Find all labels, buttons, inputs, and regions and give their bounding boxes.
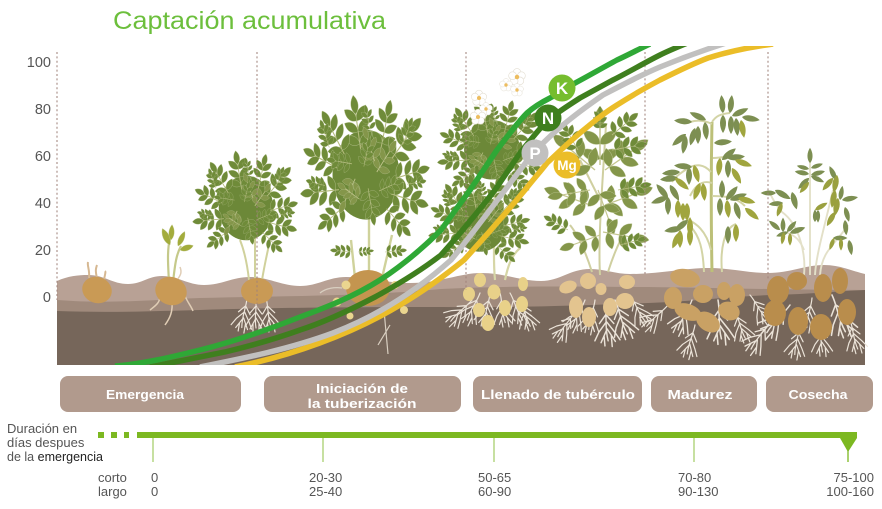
stage: Emergencia: Emergencia	[106, 387, 185, 402]
uptake curves	[115, 42, 773, 367]
duration labels: 25-40	[309, 484, 342, 499]
duration labels: 90-130	[678, 484, 718, 499]
duration labels: 50-65	[478, 470, 511, 485]
y axis labels: 80	[35, 102, 51, 118]
duration labels: 70-80	[678, 470, 711, 485]
stage: Cosecha: Cosecha	[788, 387, 848, 402]
title: Captación acumulativa	[113, 7, 386, 35]
stage: Iniciación de la tuberización: la tuberización	[308, 396, 417, 411]
stage: Emergencia	[60, 376, 241, 412]
plant 1: sprouting tuber	[78, 262, 116, 307]
nutrient marker: P: P	[529, 144, 541, 163]
stage: Cosecha	[766, 376, 873, 412]
duration labels: 60-90	[478, 484, 511, 499]
nutrient marker: N: N	[542, 109, 554, 128]
curve: magnesium	[235, 44, 773, 367]
plant 3: young foliage and tuber	[191, 148, 300, 334]
nutrient marker: N	[534, 104, 562, 132]
stage: Iniciación de la tuberización: Iniciación de	[316, 381, 408, 396]
duration labels: 0	[151, 470, 158, 485]
duration labels	[98, 470, 874, 499]
timeline label	[7, 421, 104, 464]
plant 7: maturing plant	[635, 95, 778, 361]
stage: Iniciación de la tuberización	[264, 376, 461, 412]
plant 8: harvest plant	[738, 148, 869, 361]
y axis labels	[27, 55, 51, 306]
y axis labels: 100	[27, 55, 51, 71]
soil layers	[57, 265, 865, 365]
plant 6: tuber filling	[538, 104, 659, 348]
curve: potassium	[115, 44, 650, 366]
y axis labels: 40	[35, 196, 51, 212]
plant 4: tuber initiation	[298, 92, 433, 354]
y axis labels: 20	[35, 243, 51, 259]
timeline label: de la emergencia	[7, 449, 104, 464]
nutrient marker: Mg: Mg	[557, 158, 577, 173]
stage divider lines	[57, 52, 768, 310]
timeline label: días despues	[7, 435, 85, 450]
nutrient marker: K	[548, 74, 576, 102]
curve: phosphorus	[200, 43, 726, 367]
nutrient marker: P	[522, 140, 548, 166]
plant 2: seedling	[150, 224, 194, 325]
nutrient marker: Mg	[554, 152, 580, 178]
stage: Llenado de tubérculo	[473, 376, 642, 412]
duration labels: largo	[98, 484, 127, 499]
stage: Madurez	[651, 376, 757, 412]
y axis labels: 0	[43, 290, 51, 306]
duration labels: 75-100	[834, 470, 874, 485]
duration labels: corto	[98, 470, 127, 485]
flowers	[470, 69, 525, 124]
nutrient marker: K: K	[556, 79, 569, 98]
timeline label: Duración en	[7, 421, 77, 436]
curve: nitrogen	[150, 42, 690, 367]
duration labels: 20-30	[309, 470, 342, 485]
duration labels: 100-160	[826, 484, 874, 499]
stage: Llenado de tubérculo: Llenado de tubérculo	[481, 387, 635, 402]
plant 5: flowering plant	[427, 69, 548, 335]
timeline bar	[98, 432, 857, 462]
duration labels: 0	[151, 484, 158, 499]
y axis labels: 60	[35, 149, 51, 165]
stage: Madurez: Madurez	[668, 387, 733, 402]
